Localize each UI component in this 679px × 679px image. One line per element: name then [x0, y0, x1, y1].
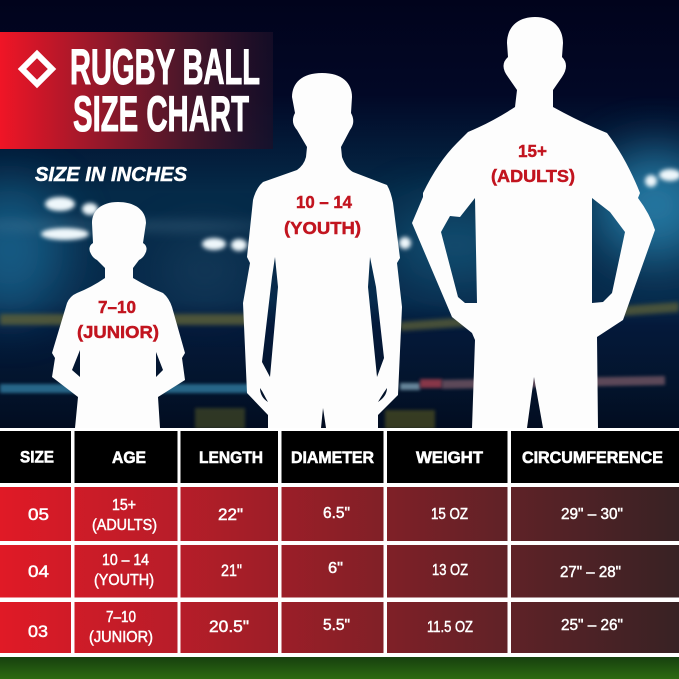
- title: RUGBY BALL: [70, 39, 260, 95]
- silhouette label: youth: (YOUTH): [284, 218, 361, 238]
- table row: size 05: 15 OZ: [431, 506, 468, 523]
- table row: size 05: 05: [28, 505, 49, 524]
- table row: size 03: 20.5": [209, 617, 249, 636]
- table row: size 03: 11.5 OZ: [427, 619, 473, 636]
- table header row: DIAMETER: [291, 448, 374, 467]
- table row: size 03: 7–10: [106, 609, 136, 626]
- stadium background: [0, 0, 679, 429]
- table row: size 05: 22": [218, 505, 243, 524]
- table row: size 04: 04: [28, 562, 49, 581]
- icon: diamond: [22, 54, 52, 84]
- table header row: [0, 431, 679, 483]
- silhouette label: adult: (ADULTS): [491, 166, 575, 186]
- table row: size 05: 6.5": [323, 505, 350, 522]
- stadium floodlights: [41, 169, 679, 251]
- table row: size 05: [0, 487, 679, 541]
- table row: size 03: 5.5": [323, 617, 350, 634]
- table row: size 04: 27" – 28": [560, 564, 621, 581]
- title: SIZE CHART: [73, 86, 249, 142]
- silhouette: youth: [243, 73, 402, 428]
- table row: size 05: 29" – 30": [561, 506, 623, 523]
- silhouette label: youth: 10 – 14: [296, 192, 352, 212]
- silhouette label: junior: [77, 297, 159, 342]
- silhouette label: adult: [491, 141, 575, 186]
- silhouette label: adult: 15+: [518, 141, 547, 161]
- table header row: AGE: [112, 448, 146, 467]
- table row: size 04: [0, 545, 679, 598]
- table row: size 03: 03: [28, 622, 48, 641]
- table header row: CIRCUMFERENCE: [522, 448, 663, 467]
- title banner: [0, 32, 273, 149]
- table row: size 04: 10 – 14: [102, 552, 149, 569]
- table row: size 04: 21": [221, 561, 242, 580]
- table row: size 05: 15+: [112, 497, 136, 514]
- table row: size 03: 25" – 26": [561, 617, 623, 634]
- silhouette label: junior: 7–10: [98, 297, 136, 317]
- table row: size 04: (YOUTH): [94, 572, 154, 589]
- table header row: SIZE: [20, 448, 54, 466]
- table header row: WEIGHT: [416, 448, 484, 467]
- silhouette: adult: [412, 17, 655, 428]
- grass strip: [0, 657, 679, 679]
- table header row: LENGTH: [199, 448, 263, 467]
- size table: [0, 428, 679, 657]
- subtitle: size in inches: SIZE IN INCHES: [35, 164, 188, 186]
- silhouette: junior: [52, 202, 185, 428]
- table row: size 05: (ADULTS): [92, 517, 157, 534]
- silhouette label: youth: [284, 192, 361, 238]
- table row: size 04: 13 OZ: [432, 562, 468, 579]
- silhouette label: junior: (JUNIOR): [77, 322, 159, 342]
- table row: size 03: [0, 602, 679, 653]
- table row: size 04: 6": [328, 560, 343, 577]
- table row: size 03: (JUNIOR): [89, 629, 153, 646]
